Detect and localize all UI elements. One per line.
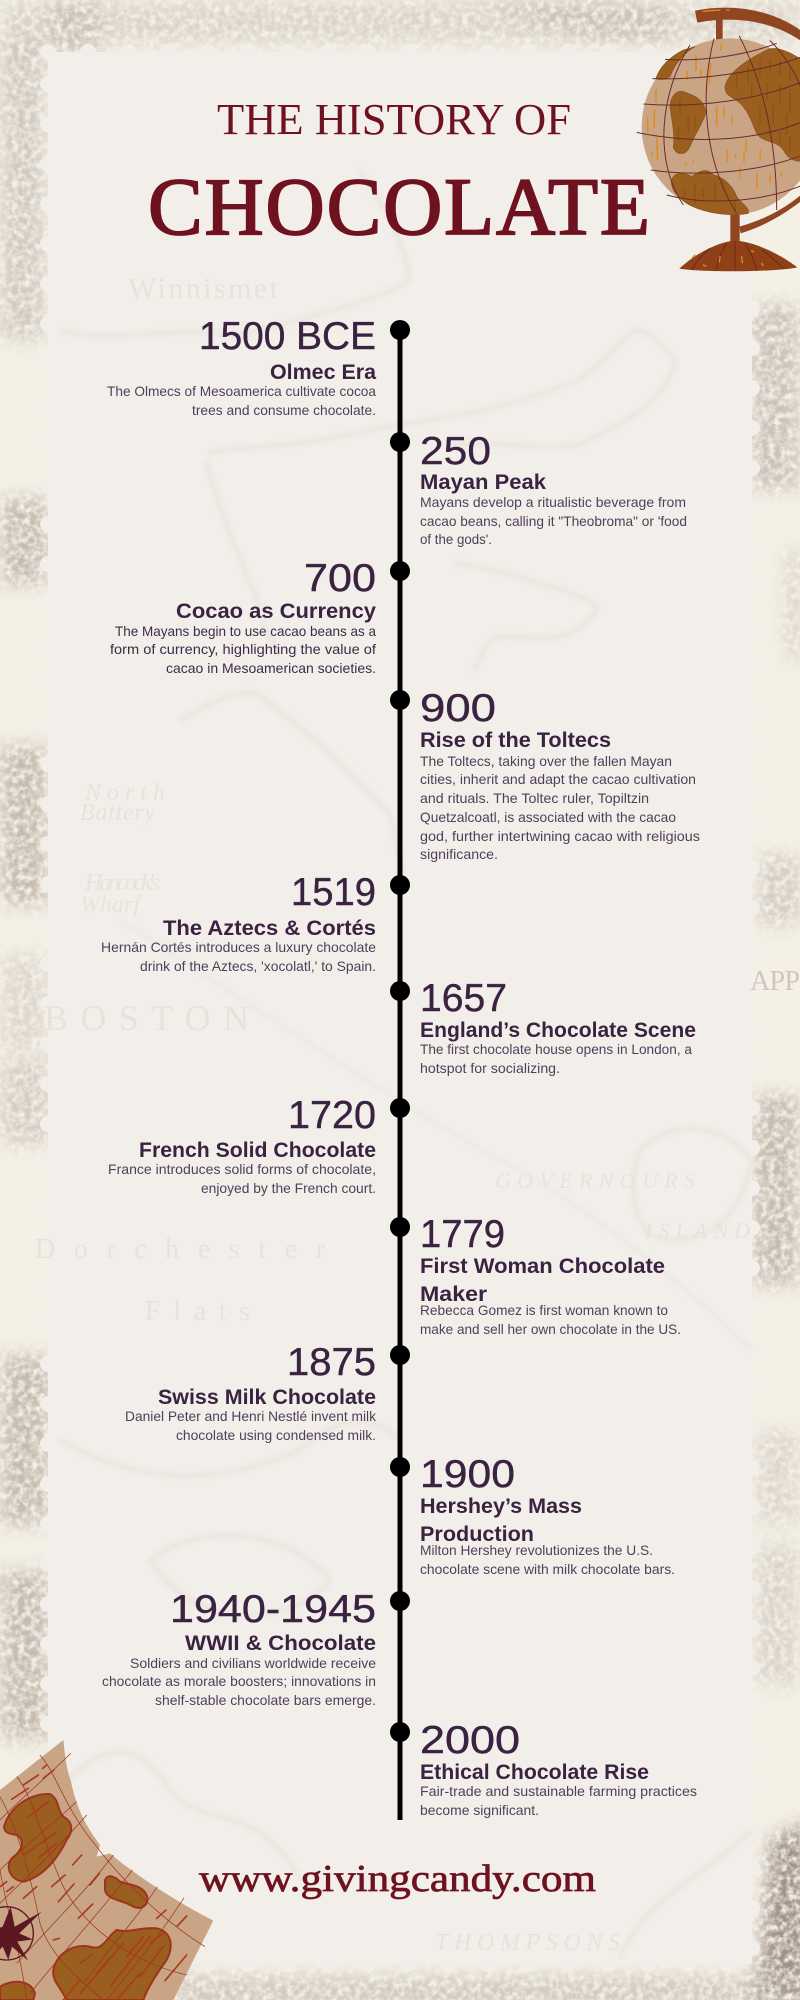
- description: and rituals. The Toltec ruler, Topiltzin: [420, 790, 649, 806]
- node: [390, 1217, 410, 1237]
- description: Quetzalcoatl, is associated with the cacao: [420, 809, 676, 825]
- year: 1900: [420, 1453, 515, 1496]
- year: 1779: [420, 1213, 505, 1256]
- event: 1519 The Aztecs and Cortes: [101, 871, 410, 974]
- node: [390, 1098, 410, 1118]
- year: 2000: [420, 1719, 520, 1762]
- title line 1: THE HISTORY OF: [217, 95, 571, 144]
- map continents: [0, 1794, 171, 2000]
- description: Mayans develop a ritualistic beverage from: [420, 494, 686, 510]
- background: faint map place names: BOSTON: [44, 998, 249, 1038]
- description: chocolate using condensed milk.: [176, 1427, 376, 1443]
- map compass: [0, 1907, 42, 1961]
- description: of the gods'.: [420, 531, 492, 547]
- globe specks: [648, 45, 781, 188]
- description: chocolate as morale boosters; innovations in: [102, 1673, 376, 1689]
- description: form of currency, highlighting the value of: [110, 641, 376, 657]
- description: Hernán Cortés introduces a luxury chocolate: [101, 939, 376, 955]
- description: enjoyed by the French court.: [201, 1180, 376, 1196]
- description: become significant.: [420, 1802, 539, 1818]
- description: The Toltecs, taking over the fallen Mayan: [420, 753, 672, 769]
- background: faint map place names: Battery: [80, 800, 155, 826]
- node: [390, 320, 410, 340]
- description: The Mayans begin to use cacao beans as a: [115, 623, 376, 639]
- node: [390, 432, 410, 452]
- description: chocolate scene with milk chocolate bars.: [420, 1561, 675, 1577]
- node: [390, 690, 410, 710]
- description: make and sell her own chocolate in the US.: [420, 1321, 681, 1337]
- event: 900 Rise of the Toltecs: [390, 687, 700, 862]
- event: 1500 BCE Olmec Era: [107, 315, 410, 418]
- description: The Olmecs of Mesoamerica cultivate cocoa: [107, 383, 376, 399]
- heading: Mayan Peak: [420, 471, 546, 494]
- heading: Production: [420, 1523, 534, 1546]
- background: faint map place names: Hancock's: [84, 870, 160, 896]
- globe grid lines: [637, 36, 800, 213]
- year: 1875: [287, 1341, 376, 1384]
- heading: The Aztecs & Cortés: [163, 917, 376, 940]
- event: 1900 Hershey's Mass Production: [390, 1453, 675, 1577]
- node: [390, 1345, 410, 1365]
- icon: treasure map: [0, 1740, 213, 2000]
- description: god, further intertwining cacao with religious: [420, 828, 700, 844]
- heading: Swiss Milk Chocolate: [158, 1386, 376, 1409]
- event: 1875 Swiss Milk Chocolate: [125, 1341, 410, 1443]
- map hatch marks: [0, 1765, 187, 2000]
- year: 700: [304, 557, 376, 600]
- node: [390, 1591, 410, 1611]
- title line 2: CHOCOLATE: [148, 161, 650, 252]
- event: 700 Cocao as Currency: [110, 557, 410, 676]
- year: 1500 BCE: [199, 315, 376, 358]
- background: faint map place names: THOMPSONS: [435, 1930, 620, 1956]
- background: faint map place names: Flats: [145, 1296, 250, 1327]
- heading: Rise of the Toltecs: [420, 729, 611, 752]
- map grid lines: [0, 1753, 205, 2000]
- timeline line: [398, 330, 402, 1820]
- heading: Olmec Era: [270, 361, 376, 384]
- description: shelf-stable chocolate bars emerge.: [155, 1692, 376, 1708]
- event: 1657 England's Chocolate Scene: [390, 977, 696, 1076]
- title: [148, 95, 650, 252]
- map paper: [0, 1740, 213, 2000]
- node: [390, 1722, 410, 1742]
- heading: WWII & Chocolate: [185, 1632, 376, 1655]
- heading: First Woman Chocolate: [420, 1255, 665, 1278]
- description: cacao beans, calling it "Theobroma" or 'food: [420, 513, 687, 529]
- node: [390, 1457, 410, 1477]
- background: faint map place names: Wharf: [80, 892, 143, 918]
- background: faint map place names: Dorchester: [35, 1234, 326, 1265]
- background: faint map outlines: [60, 170, 752, 1960]
- globe stand: [679, 8, 800, 271]
- year: 1657: [420, 977, 507, 1020]
- background: faint map place names: ISLAND: [644, 1218, 750, 1243]
- website footer: www.givingcandy.com: [199, 1858, 596, 1900]
- description: Daniel Peter and Henri Nestlé invent milk: [125, 1408, 377, 1424]
- heading: Maker: [420, 1283, 487, 1306]
- node: [390, 875, 410, 895]
- description: cacao in Mesoamerican societies.: [166, 660, 376, 676]
- heading: Ethical Chocolate Rise: [420, 1761, 649, 1784]
- description: Rebecca Gomez is first woman known to: [420, 1302, 668, 1318]
- heading: French Solid Chocolate: [139, 1139, 376, 1162]
- year: 1519: [291, 871, 376, 914]
- background: faint map place names: Winnismet: [128, 272, 279, 305]
- icon: globe: [637, 8, 800, 271]
- globe sphere: [642, 38, 800, 215]
- heading: England’s Chocolate Scene: [420, 1019, 696, 1042]
- year: 250: [420, 430, 491, 473]
- description: Soldiers and civilians worldwide receive: [130, 1655, 376, 1671]
- year: 1720: [288, 1094, 376, 1137]
- event: 250 Mayan Peak: [390, 430, 687, 547]
- description: significance.: [420, 846, 498, 862]
- background: faint map place names: APP: [750, 966, 800, 997]
- description: The first chocolate house opens in London, a: [420, 1041, 692, 1057]
- description: cities, inherit and adapt the cacao cultivation: [420, 771, 696, 787]
- description: Milton Hershey revolutionizes the U.S.: [420, 1542, 653, 1558]
- description: hotspot for socializing.: [420, 1060, 560, 1076]
- event: 1779 First Woman Chocolate Maker: [390, 1213, 681, 1337]
- event: 1720 French Solid Chocolate: [108, 1094, 410, 1196]
- background: faint map place names: North: [84, 780, 165, 806]
- description: Fair-trade and sustainable farming practices: [420, 1783, 697, 1799]
- node: [390, 981, 410, 1001]
- description: France introduces solid forms of chocolate,: [108, 1161, 376, 1177]
- background: faint map place names: GOVERNOURS: [495, 1168, 695, 1193]
- heading: Hershey’s Mass: [420, 1495, 582, 1518]
- year: 900: [420, 687, 496, 730]
- heading: Cocao as Currency: [176, 600, 376, 623]
- event: 1940-1945 WWII and Chocolate: [102, 1588, 410, 1708]
- globe continents: [656, 47, 800, 215]
- event: 2000 Ethical Chocolate Rise: [390, 1719, 697, 1818]
- description: trees and consume chocolate.: [192, 402, 376, 418]
- description: drink of the Aztecs, 'xocolatl,' to Spain.: [140, 958, 376, 974]
- year: 1940-1945: [170, 1588, 376, 1631]
- node: [390, 561, 410, 581]
